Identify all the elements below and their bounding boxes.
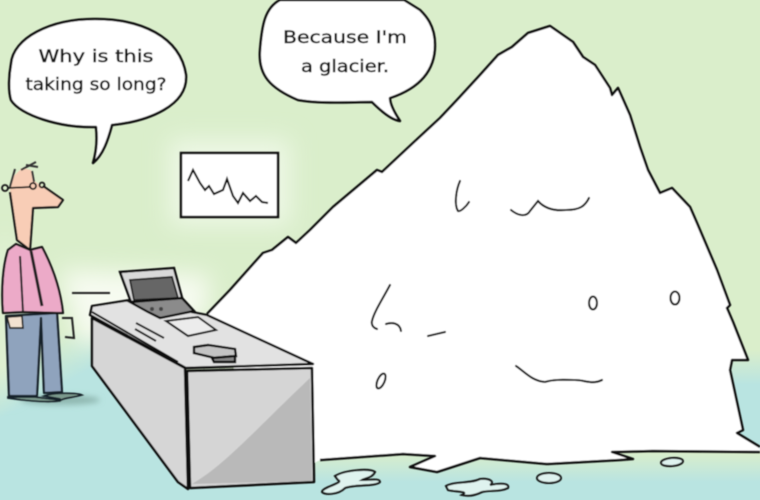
glacier crack marks	[372, 181, 680, 390]
wall chart	[181, 153, 278, 217]
desk	[90, 268, 314, 489]
desk papers	[135, 317, 216, 341]
trousers	[6, 313, 62, 396]
floor shadow	[20, 395, 100, 405]
desk side	[92, 318, 188, 489]
head	[10, 168, 63, 250]
laptop	[120, 268, 194, 318]
shirt	[2, 244, 63, 313]
desk front	[187, 368, 314, 488]
speech bubble: glacier	[260, 0, 435, 121]
floor background	[0, 330, 760, 500]
hands	[7, 316, 23, 328]
man	[2, 162, 110, 405]
tie	[31, 251, 42, 306]
glacier	[207, 26, 760, 496]
shoes	[8, 393, 82, 402]
customer question text: Why is this	[38, 47, 154, 66]
glacier reply text: Because I'm	[283, 28, 407, 47]
speech bubble: customer	[9, 19, 186, 163]
desk top	[90, 300, 313, 368]
soft white wall glow	[0, 140, 290, 390]
speech bubble: customer: taking so long?	[26, 75, 166, 94]
hair	[10, 162, 38, 187]
desk stapler and books	[194, 345, 236, 362]
meltwater puddles	[322, 457, 683, 496]
glasses	[2, 182, 44, 191]
speech bubble: glacier: a glacier.	[301, 57, 389, 76]
